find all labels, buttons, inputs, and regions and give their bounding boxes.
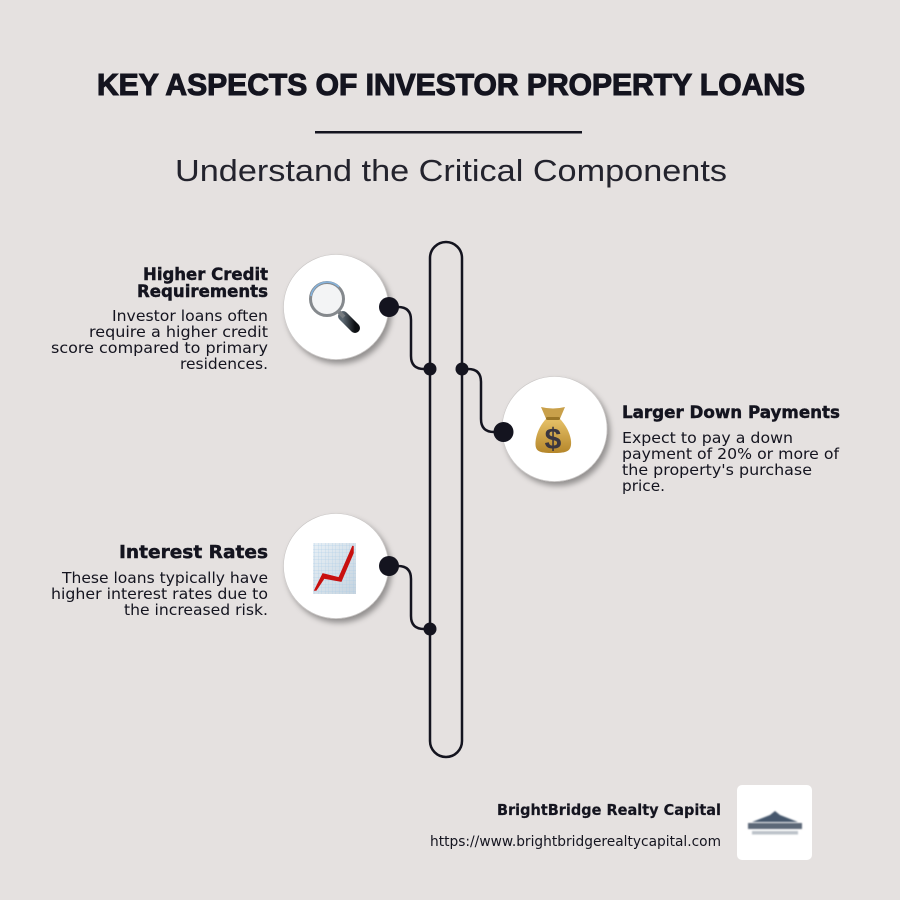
logo — [737, 785, 812, 860]
footer: company name: BrightBridge Realty Capital — [497, 801, 721, 819]
text: interest description: These loans typically have — [61, 569, 268, 587]
node: credit timeline dot — [424, 362, 436, 376]
text: credit description — [51, 307, 268, 373]
text: down payment description: the property's purchase — [622, 461, 812, 479]
panel: interest rates — [51, 514, 436, 636]
title: KEY ASPECTS OF INVESTOR PROPERTY LOANS — [97, 67, 805, 102]
icon: magnifying glass — [310, 282, 355, 328]
heading: interest rates: Interest Rates — [119, 542, 268, 563]
text: interest description: higher interest rates due to — [51, 585, 268, 603]
node: credit large dot — [379, 297, 399, 317]
connector: credit to timeline — [389, 307, 430, 369]
icon: money bag: $ — [545, 423, 562, 456]
icon: money bag — [535, 407, 571, 456]
node: interest timeline dot — [424, 622, 436, 636]
text: interest description — [51, 569, 268, 619]
text: credit description: residences. — [180, 355, 268, 373]
text: down payment description: Expect to pay a down — [622, 429, 793, 447]
subtitle: Understand the Critical Components — [175, 153, 727, 188]
panel: higher credit requirements — [51, 254, 436, 376]
connector: timeline to down payment — [462, 369, 503, 432]
node: down payment timeline dot — [456, 362, 468, 376]
heading: higher credit requirements — [137, 265, 268, 302]
node: down payment large dot — [494, 422, 514, 442]
footer: website url: https://www.brightbridgerealtycapital.com — [430, 834, 721, 850]
text: credit description: score compared to primary — [51, 339, 268, 357]
text: credit description: require a higher credit — [89, 323, 268, 341]
text: down payment description: payment of 20% or more of — [622, 445, 840, 463]
icon: rising chart — [313, 543, 356, 594]
circle badge: down payment — [502, 376, 607, 482]
text: down payment description: price. — [622, 477, 665, 495]
circle badge: interest — [284, 514, 388, 618]
text: credit description: Investor loans often — [112, 307, 268, 325]
circle badge: credit — [284, 254, 388, 360]
node: interest large dot — [379, 556, 399, 576]
heading: higher credit requirements: Requirements — [137, 282, 268, 302]
central pill timeline — [430, 242, 462, 757]
heading: higher credit requirements: Higher Credit — [143, 265, 268, 285]
text: down payment description — [622, 429, 840, 495]
heading: larger down payments: Larger Down Payments — [622, 403, 840, 423]
panel: larger down payments — [456, 362, 840, 495]
connector: interest to timeline — [389, 566, 430, 629]
text: interest description: the increased risk. — [124, 601, 268, 619]
